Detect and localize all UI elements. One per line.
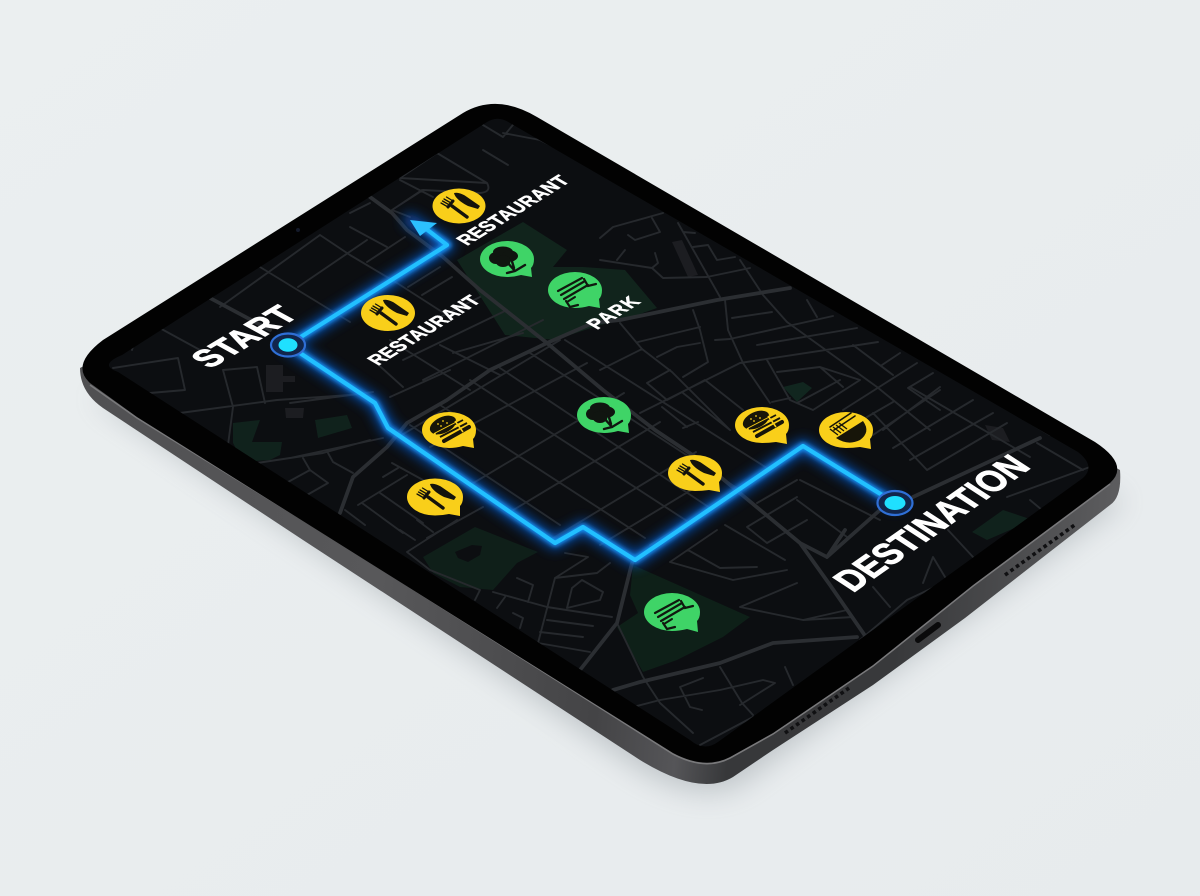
- usb-c port: [918, 625, 938, 640]
- bench icon: [558, 278, 596, 307]
- pin body: [819, 412, 873, 449]
- park east: [972, 510, 1033, 540]
- fork and knife icon: [677, 460, 716, 484]
- label: start: START: [183, 301, 307, 373]
- label: destination: DESTINATION: [825, 449, 1039, 598]
- map labels and pins: [183, 173, 1039, 632]
- destination dot: [884, 496, 906, 510]
- pin: restaurant right: [668, 455, 722, 492]
- pin body: [577, 397, 631, 433]
- pin: noodles: [819, 412, 873, 449]
- map background: [109, 119, 1088, 746]
- pin: burger right: [735, 407, 789, 444]
- tree icon: [586, 402, 622, 429]
- destination ring: [878, 491, 912, 515]
- noodle bowl icon: [830, 413, 866, 443]
- fork and knife icon: [417, 484, 456, 508]
- pin: bench south: [644, 593, 700, 632]
- pin body: [644, 593, 700, 632]
- tablet shadow: [90, 395, 1125, 792]
- fork and knife icon: [370, 300, 409, 324]
- route arrow head: [410, 220, 437, 236]
- pin body: [361, 295, 415, 331]
- start dot: [278, 338, 298, 352]
- pin body: [432, 188, 486, 224]
- tablet device: [80, 104, 1120, 784]
- pin body: [407, 478, 463, 516]
- park areas: [233, 222, 1033, 672]
- label: restaurant upper: RESTAURANT: [452, 173, 576, 249]
- pin body: [480, 241, 534, 277]
- route glow tight: [288, 228, 895, 560]
- screen: [109, 119, 1088, 746]
- bench icon: [655, 600, 693, 629]
- pin: restaurant lower left: [407, 478, 463, 516]
- pin: bench park north: [548, 272, 602, 308]
- route glow: [288, 220, 895, 560]
- route line: [288, 228, 895, 560]
- pin: tree centre: [577, 397, 631, 433]
- burger icon: [740, 407, 782, 436]
- label: restaurant lower: RESTAURANT: [363, 293, 487, 369]
- camera: [296, 228, 300, 232]
- pin: restaurant top: [432, 188, 486, 224]
- major roads: [210, 197, 1040, 690]
- pin body: [422, 412, 476, 448]
- label: park: PARK: [582, 294, 646, 333]
- tree icon: [489, 246, 525, 273]
- pin: restaurant near start: [361, 295, 415, 331]
- pin body: [548, 272, 602, 308]
- start node: [271, 334, 305, 356]
- speaker grille right: [1005, 524, 1076, 575]
- tablet side edge: [80, 250, 1120, 784]
- destination node: [878, 491, 912, 515]
- park west a: [233, 420, 282, 462]
- park west b: [315, 415, 352, 438]
- side highlight: [90, 385, 1110, 764]
- burger icon: [427, 412, 469, 441]
- park south: [617, 565, 750, 672]
- route glow wide: [288, 220, 895, 560]
- pin body: [668, 455, 722, 492]
- minor roads: [113, 120, 1090, 745]
- start ring: [271, 334, 305, 356]
- pin: burger left: [422, 412, 476, 448]
- pin body: [735, 407, 789, 444]
- speaker grille bottom: [785, 688, 849, 733]
- fork and knife icon: [441, 193, 480, 217]
- park small: [783, 382, 812, 402]
- park southwest: [423, 527, 538, 590]
- park north: [457, 222, 657, 340]
- building blocks: [266, 240, 1010, 442]
- tablet black front face: [82, 104, 1117, 763]
- pin: tree park north: [480, 241, 534, 277]
